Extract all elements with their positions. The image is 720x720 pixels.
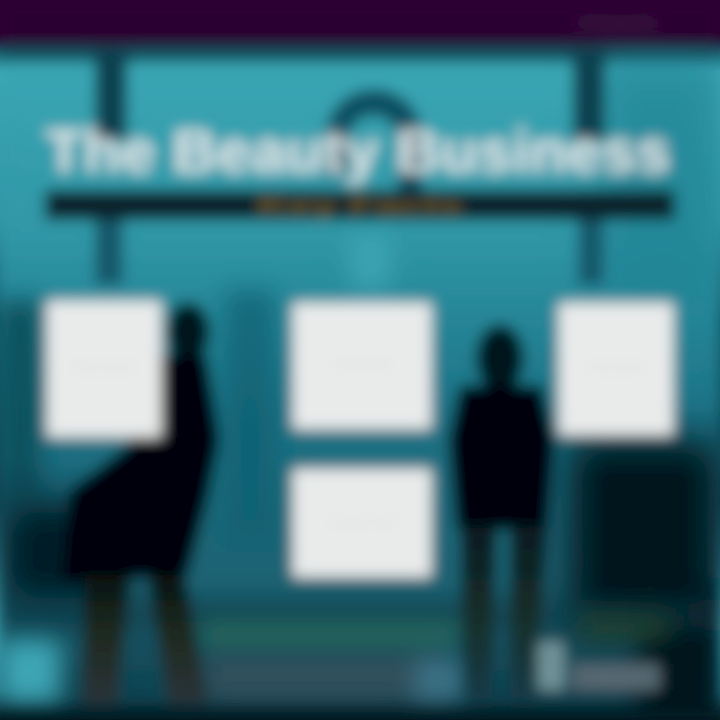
panel: right card: [559, 303, 673, 435]
centre bottom card text: Consumer trends: [327, 517, 397, 527]
logo: bottom right: [538, 642, 660, 690]
centre top card text: Industry growth: [331, 360, 393, 370]
silhouette: left person: [62, 302, 220, 702]
title: The Beauty Business: [46, 118, 670, 185]
subtitle: Key Facts: [258, 192, 462, 220]
subtitle band: [45, 190, 675, 220]
right card text: Future outlook: [587, 362, 645, 372]
panel: centre bottom card: [293, 469, 431, 577]
pillars and arch: [95, 50, 605, 285]
logo: bottom right: Source: [594, 671, 638, 687]
top bar label: Infographic: [576, 13, 661, 32]
panel: centre top card: [293, 303, 431, 429]
silhouette: right person: [448, 324, 555, 700]
left card text: Market overview: [71, 362, 137, 372]
top bar: [0, 0, 720, 46]
panel: left card: [47, 301, 161, 437]
